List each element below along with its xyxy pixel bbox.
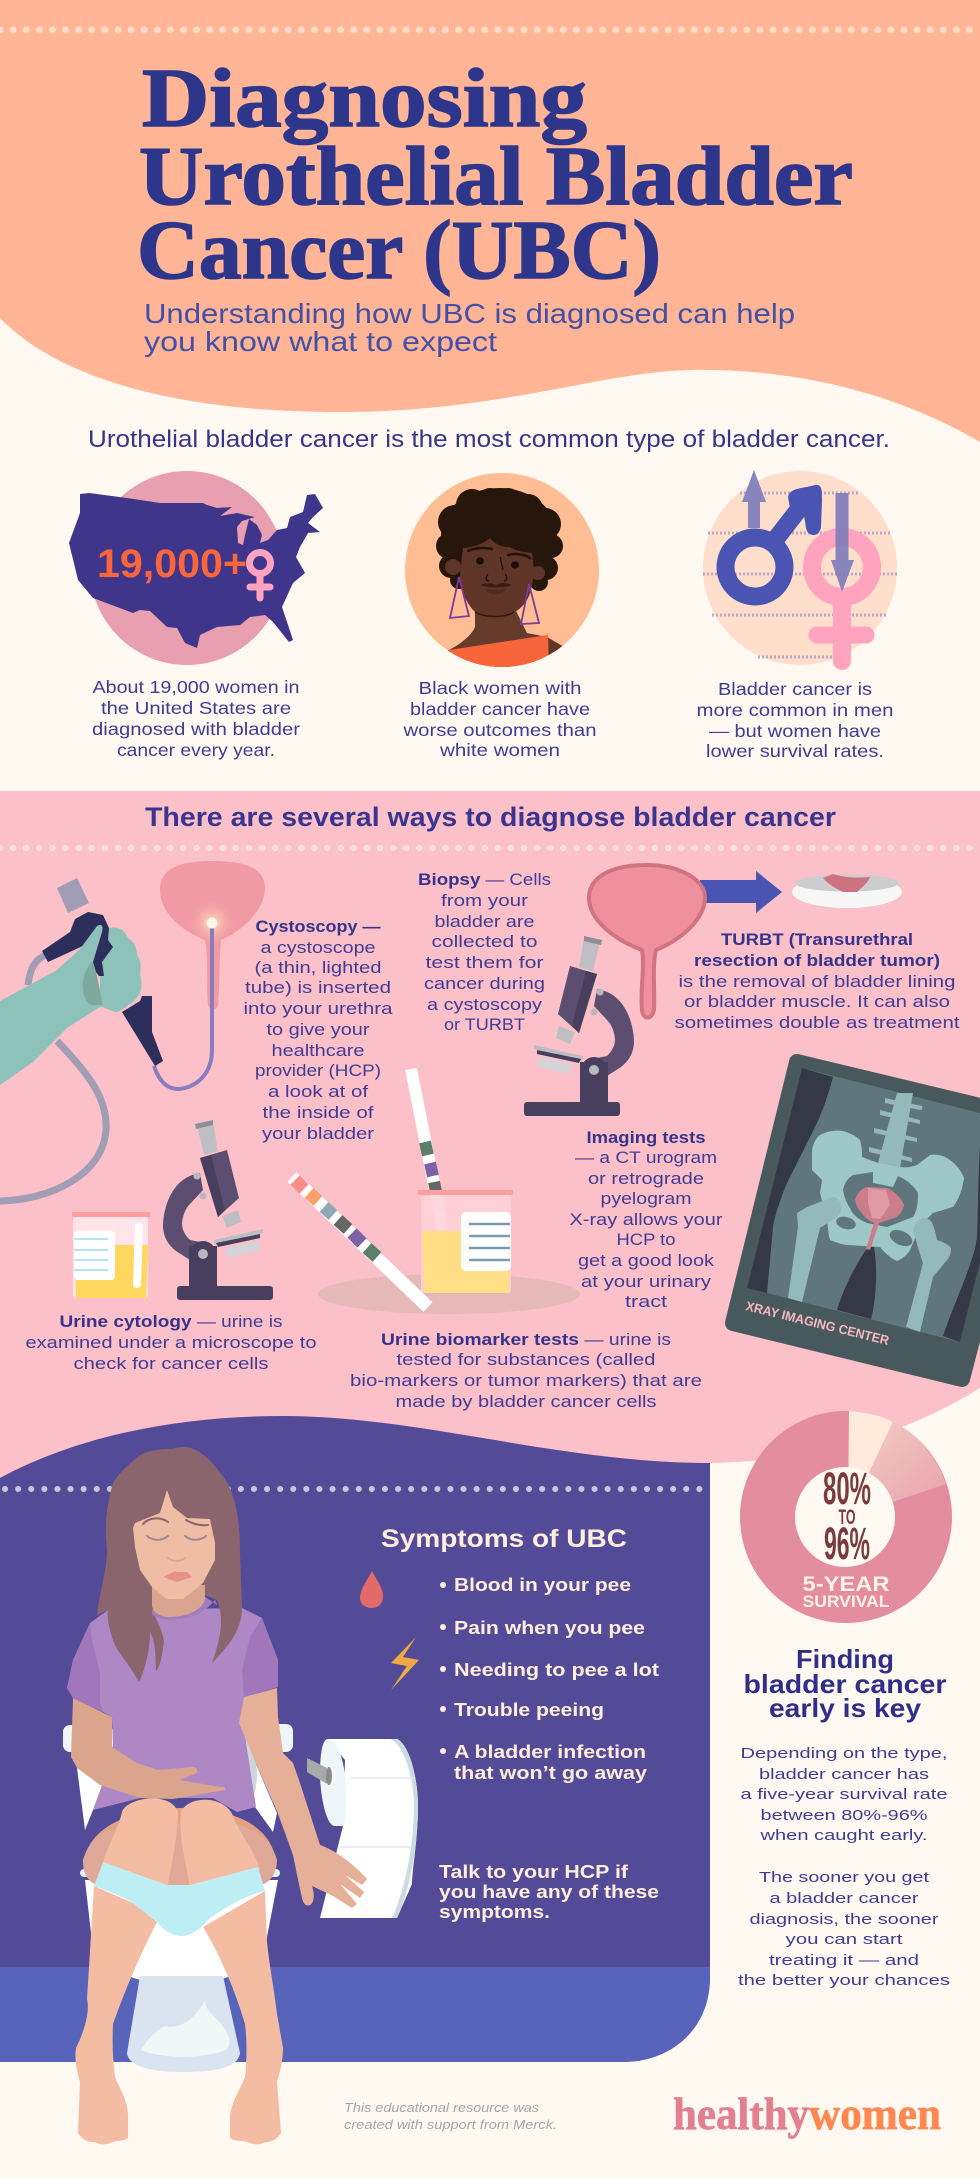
intro sentence: Urothelial bladder cancer is the most common type of bladder cancer. (88, 426, 890, 453)
callout: talk to your HCP: you have any of these (439, 1882, 659, 1902)
footer: sponsor note: created with support from Merck. (344, 2117, 557, 2132)
text: cystoscopy: (a thin, lighted (254, 958, 382, 977)
text: urine biomarker tests (350, 1330, 702, 1411)
spine (869, 1093, 922, 1168)
chart: 5-year survival pie: 5-YEAR (802, 1573, 890, 1596)
text: biopsy: test them for (426, 953, 544, 972)
text: TURBT: resection of bladder tumor) (694, 951, 940, 970)
illustration: woman on toilet (63, 1447, 367, 2144)
title: Urothelial Bladder (139, 130, 853, 223)
illustration: toilet paper roll (307, 1739, 418, 1918)
text: biopsy: a cystoscopy (427, 995, 543, 1014)
caption: Black women outcomes: bladder cancer have (410, 699, 590, 719)
hair (97, 1447, 242, 1682)
illustration: urine test strips and beaker (292, 1069, 580, 1314)
text: biopsy: cancer during (424, 974, 545, 993)
left arm and hand (71, 1698, 225, 1799)
right arm and hand (239, 1688, 367, 1908)
hips (83, 1808, 276, 1885)
header background (0, 0, 980, 442)
caption: Black women outcomes: white women (439, 740, 560, 760)
title: Diagnosing (142, 52, 587, 145)
text: imaging tests: HCP to (616, 1230, 676, 1249)
text: biopsy: or TURBT (444, 1015, 525, 1034)
panel: ways to diagnose background (0, 791, 980, 1482)
text: cystoscopy: to give your (266, 1020, 370, 1039)
caption: 19,000 women: cancer every year. (117, 740, 275, 760)
upper handle (42, 912, 113, 976)
list: symptoms (440, 1575, 659, 1783)
title (137, 52, 853, 297)
text: sooner diagnosis (738, 1869, 950, 1989)
icon: lightning bolt (391, 1637, 419, 1690)
down arrow (831, 493, 854, 592)
text: imaging tests: tract (625, 1292, 667, 1311)
text: survival rate: Depending on the type, (740, 1745, 948, 1762)
text: imaging tests (570, 1128, 723, 1311)
text: imaging tests: get a good look (578, 1251, 715, 1270)
callout: talk to your HCP: Talk to your HCP if (439, 1862, 629, 1882)
heading: symptoms of UBC: Symptoms of UBC (381, 1525, 627, 1553)
chart: 5-year survival pie: SURVIVAL (802, 1592, 890, 1611)
pelvis (812, 1131, 964, 1261)
caption: gender difference: Bladder cancer is (718, 679, 872, 699)
chart: 5-year survival pie: 96% (824, 1518, 870, 1569)
text: urine cytology: check for cancer cells (74, 1354, 268, 1373)
illustration: microscope (cytology) (163, 1120, 273, 1300)
text: imaging tests: at your urinary (581, 1272, 712, 1291)
text: survival rate (740, 1745, 948, 1844)
text: sooner diagnosis: a bladder cancer (770, 1890, 918, 1907)
illustration: beaker of urine (72, 1212, 150, 1298)
list: symptoms: Blood in your pee (454, 1575, 631, 1595)
list: symptoms: that won’t go away (454, 1763, 647, 1783)
lower handle (122, 996, 163, 1066)
text: urine biomarker tests: made by bladder cancer cells (396, 1392, 656, 1411)
footer: sponsor note: This educational resource was (344, 2100, 540, 2115)
text: TURBT (674, 930, 960, 1032)
text: cystoscopy: a cystoscope (260, 938, 376, 957)
thighs (103, 1798, 178, 1890)
illustration: microscope (biopsy) (524, 936, 634, 1116)
text: biopsy: collected to (432, 932, 538, 951)
text: cystoscopy: provider (HCP) (255, 1061, 381, 1080)
icon: blood drop (360, 1571, 383, 1608)
heading: finding early: early is key (769, 1693, 922, 1723)
text: biopsy: Biopsy — Cells (418, 870, 551, 889)
caption: gender difference: more common in men (696, 700, 894, 720)
text: sooner diagnosis: you can start (786, 1931, 904, 1948)
upright strip (411, 1069, 443, 1230)
text: cystoscopy: healthcare (272, 1041, 364, 1060)
dish (792, 876, 902, 908)
text: urine biomarker tests: bio-markers or tumor markers) that are (350, 1371, 702, 1390)
list: symptoms: Pain when you pee (454, 1618, 645, 1638)
female symbol (812, 537, 872, 661)
forearm and thumb (0, 925, 103, 1085)
text: imaging tests: pyelogram (600, 1189, 692, 1208)
caption: Black women outcomes: Black women with (418, 678, 582, 698)
text: imaging tests: — a CT urogram (575, 1148, 717, 1167)
caption: 19,000 women (92, 677, 300, 760)
callout: talk to your HCP: symptoms. (439, 1902, 550, 1922)
text: cystoscopy: your bladder (262, 1124, 374, 1143)
text: survival rate: when caught early. (759, 1827, 928, 1844)
illustration: x-ray film: XRAY IMAGING CENTER (744, 1298, 891, 1348)
text: imaging tests: X-ray allows your (570, 1210, 723, 1229)
stat: US map 19,000 women: 19,000+ (97, 542, 247, 586)
caption: gender difference (696, 679, 894, 761)
heading: several ways: There are several ways to diagnose bladder cancer (145, 802, 837, 832)
text: urine cytology (26, 1312, 316, 1373)
text: biopsy (418, 870, 551, 1034)
caption: gender difference: — but women have (709, 721, 881, 741)
male symbol (726, 485, 822, 596)
chart: 5-year survival pie: TO (838, 1506, 856, 1529)
text: survival rate: bladder cancer has (759, 1766, 929, 1783)
illustration: cystoscope in hand (0, 861, 265, 1201)
text: cystoscopy: Cystoscopy — (256, 917, 380, 936)
text: survival rate: a five-year survival rate (740, 1786, 948, 1803)
femurs (788, 1197, 841, 1302)
caption: gender difference: lower survival rates. (706, 741, 884, 761)
text: sooner diagnosis: the better your chances (738, 1972, 950, 1989)
illustration: x-ray film (733, 1062, 980, 1379)
collar and neck (152, 1597, 217, 1620)
heading: finding early: bladder cancer (744, 1669, 946, 1699)
text: urine biomarker tests: Urine biomarker tests — urine is (381, 1330, 671, 1349)
subtitle: Understanding how UBC is diagnosed can help (144, 298, 795, 329)
text: cystoscopy: into your urethra (244, 999, 393, 1018)
logo: healthywomen: women (809, 2088, 941, 2139)
shirt (67, 1608, 278, 1812)
text: TURBT: sometimes double as treatment (674, 1013, 960, 1032)
bladder (160, 861, 265, 1010)
text: imaging tests: Imaging tests (586, 1128, 706, 1147)
text: cystoscopy (244, 917, 393, 1143)
up arrow (742, 470, 766, 528)
chart: 5-year survival pie (740, 1411, 952, 1623)
stat: US map 19,000 women (69, 471, 323, 665)
bladder (589, 865, 705, 1018)
heading: finding early: Finding (796, 1644, 894, 1674)
text: survival rate: between 80%-96% (760, 1807, 928, 1824)
heading: finding early (744, 1644, 946, 1723)
caption: 19,000 women: diagnosed with bladder (92, 719, 300, 739)
text: cystoscopy: the inside of (262, 1103, 374, 1122)
text: TURBT: or bladder muscle. It can also (684, 992, 950, 1011)
text: sooner diagnosis: The sooner you get (759, 1869, 930, 1886)
arrow (700, 871, 782, 913)
text: urine biomarker tests: tested for substances (called (396, 1350, 656, 1369)
footer: sponsor note (344, 2100, 557, 2132)
caption: 19,000 women: About 19,000 women in (92, 677, 300, 697)
panel: symptoms background (0, 1416, 710, 2062)
text: TURBT: is the removal of bladder lining (678, 972, 956, 991)
illustration: bladder, arrow and tissue dish (589, 865, 902, 1018)
list: symptoms: Needing to pee a lot (454, 1660, 659, 1680)
subtitle (144, 298, 795, 357)
face (133, 1490, 215, 1599)
text: biopsy: bladder are (434, 912, 534, 931)
text: sooner diagnosis: treating it — and (769, 1952, 919, 1969)
title: Cancer (UBC) (137, 204, 661, 297)
text: urine cytology: Urine cytology — urine is (60, 1312, 282, 1331)
beaker (421, 1195, 511, 1293)
logo: healthywomen (673, 2088, 941, 2139)
stat: gender symbols (703, 470, 897, 665)
caption: 19,000 women: the United States are (101, 698, 291, 718)
fist (100, 927, 142, 1012)
subtitle: you know what to expect (144, 326, 497, 357)
caption: Black women outcomes (402, 678, 596, 760)
underwear (94, 1862, 265, 1936)
list: symptoms: Trouble peeing (454, 1700, 604, 1720)
flat strip (292, 1177, 428, 1307)
stat: Black woman portrait (405, 473, 599, 680)
logo: healthywomen: healthy (673, 2088, 809, 2139)
callout: talk to your HCP (439, 1862, 659, 1922)
text: TURBT: TURBT (Transurethral (721, 930, 913, 949)
bladder (855, 1187, 904, 1250)
text: imaging tests: or retrograde (588, 1169, 704, 1188)
legs (75, 1886, 157, 2144)
chart: 5-year survival pie: 80% (823, 1463, 871, 1514)
text: cystoscopy: tube) is inserted (245, 978, 391, 997)
toilet (63, 1724, 293, 2072)
text: urine cytology: examined under a microscope to (26, 1333, 316, 1352)
caption: Black women outcomes: worse outcomes than (402, 720, 596, 740)
text: sooner diagnosis: diagnosis, the sooner (750, 1911, 938, 1928)
text: cystoscopy: a look at of (268, 1082, 368, 1101)
list: symptoms: A bladder infection (454, 1742, 646, 1762)
text: biopsy: from your (441, 891, 528, 910)
